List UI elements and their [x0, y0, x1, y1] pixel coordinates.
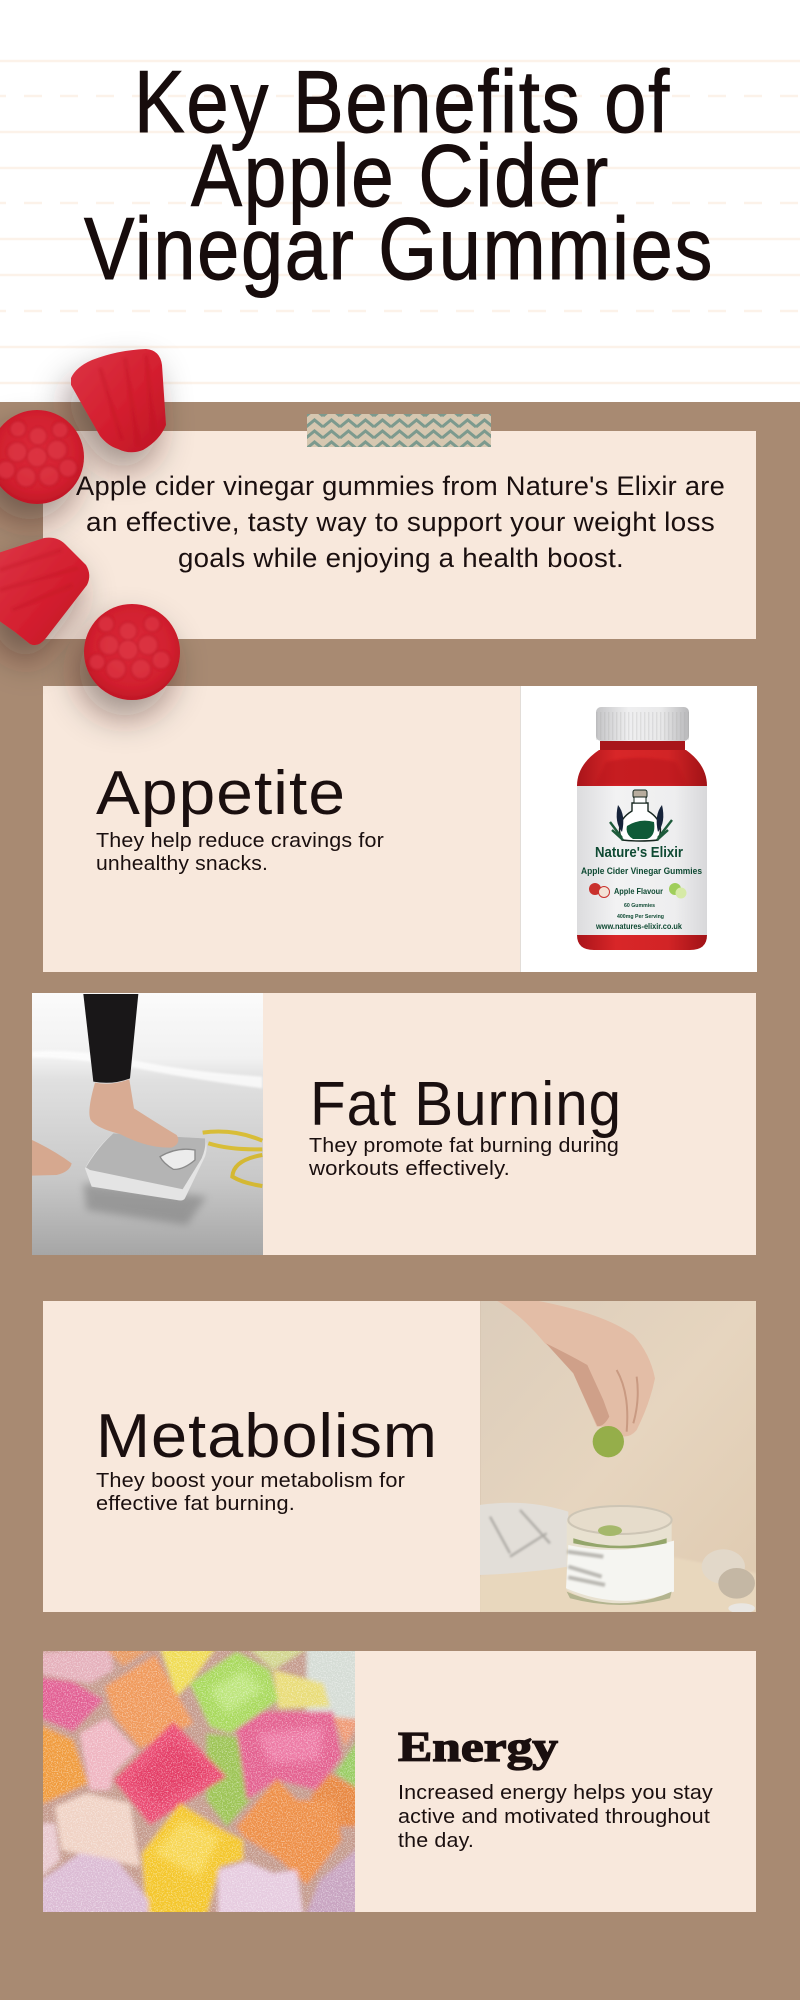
text: fat burning description: workouts effectively.	[308, 1157, 510, 1180]
decorative washi tape	[307, 414, 491, 447]
apple icons	[589, 883, 686, 898]
bottle label text: Apple Flavour	[614, 886, 664, 896]
panel: appetite background	[43, 686, 756, 972]
bottle label text: 400mg Per Serving	[617, 914, 664, 920]
bottle label text	[581, 844, 702, 931]
panel: intro background	[43, 431, 756, 639]
text: introduction: goals while enjoying a health boost.	[178, 543, 624, 573]
title: Apple Cider	[191, 126, 610, 225]
heading: Metabolism: Metabolism	[96, 1402, 438, 1471]
image: Nature's Elixir gummies bottle	[519, 686, 757, 972]
text: energy description: the day.	[398, 1829, 474, 1852]
panel: metabolism background	[43, 1301, 480, 1612]
text: introduction	[76, 471, 725, 573]
logo: flask with leaves	[610, 790, 672, 841]
text: appetite description	[96, 829, 384, 875]
bottle label text: Nature's Elixir	[595, 844, 683, 861]
heading: Energy: Energy	[398, 1725, 558, 1771]
gummy: top bell	[71, 349, 166, 452]
text: metabolism description	[96, 1469, 405, 1515]
title: Key Benefits of	[134, 52, 671, 151]
brown page background	[0, 402, 800, 2000]
text: energy description	[398, 1781, 714, 1852]
gummy: lower bell	[0, 538, 89, 645]
text: fat burning description	[308, 1134, 619, 1180]
bottle label text: www.natures-elixir.co.uk	[595, 922, 683, 931]
text: metabolism description: They boost your metabolism for	[96, 1469, 405, 1492]
panel: fat burning background	[262, 993, 756, 1255]
image: sugar coated jelly candies	[37, 1647, 360, 1917]
heading: Appetite: Appetite	[96, 759, 346, 828]
text: introduction: an effective, tasty way to support your weight loss	[86, 507, 715, 537]
image: foot on a weighing scale	[32, 993, 263, 1255]
title	[84, 52, 714, 298]
text: energy description: Increased energy helps you stay	[398, 1781, 714, 1804]
title: Vinegar Gummies	[84, 199, 714, 298]
bottle label text: Apple Cider Vinegar Gummies	[581, 866, 702, 877]
heading: Fat Burning: Fat Burning	[310, 1070, 622, 1139]
text: appetite description: unhealthy snacks.	[96, 852, 268, 875]
gummy: upper raspberry	[0, 410, 84, 504]
text: energy description: active and motivated throughout	[398, 1805, 710, 1828]
background: lined paper header	[0, 0, 800, 402]
decorative red gummies	[0, 349, 180, 700]
gummy: lower raspberry	[84, 604, 180, 700]
image: hand lifting green gummy from jar	[479, 1301, 757, 1613]
text: metabolism description: effective fat burning.	[96, 1492, 295, 1515]
bottle label text: 60 Gummies	[624, 903, 655, 909]
text: introduction: Apple cider vinegar gummies from Nature's Elixir are	[76, 471, 725, 501]
text: fat burning description: They promote fat burning during	[309, 1134, 619, 1157]
panel: energy background	[355, 1651, 756, 1912]
text: appetite description: They help reduce cravings for	[96, 829, 384, 852]
